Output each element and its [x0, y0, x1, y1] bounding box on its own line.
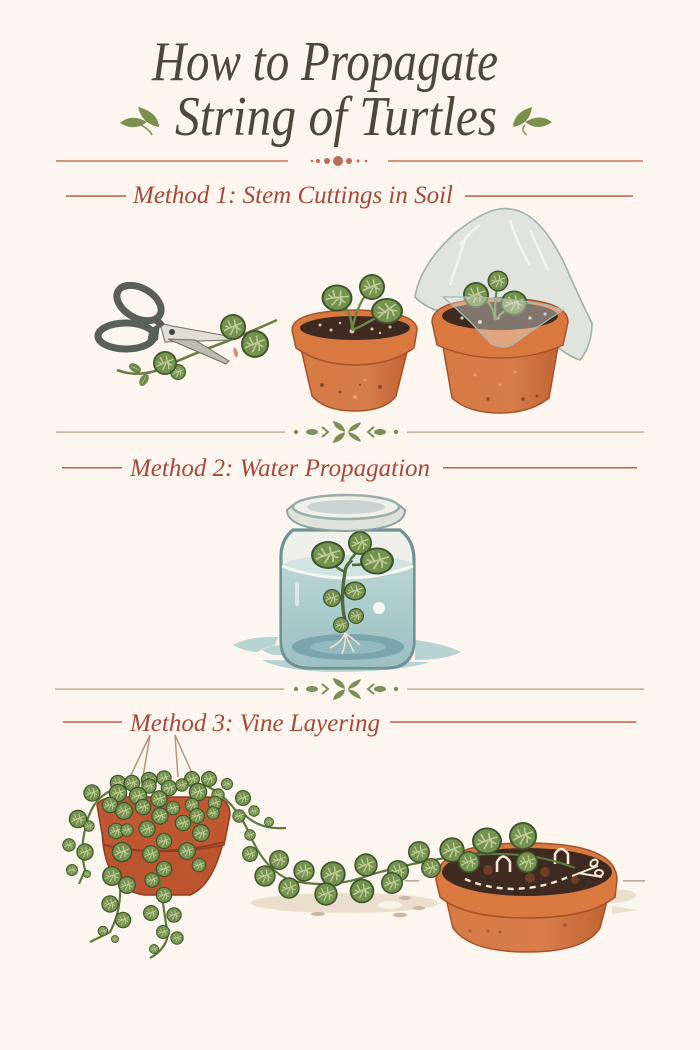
divider: leaf ornament — [55, 678, 644, 700]
heading: method 3: Method 3: Vine Layering — [129, 710, 380, 737]
divider: leaf ornament — [56, 421, 644, 443]
illustration: pot under plastic bag — [415, 208, 592, 413]
illustration: hanging pot — [97, 797, 230, 895]
icon: small scissors in soil — [572, 858, 603, 877]
icon: left title sprig — [120, 107, 159, 135]
illustration: layering pot — [436, 843, 617, 952]
ground shadow — [251, 890, 638, 917]
heading: method 2: Method 2: Water Propagation — [129, 455, 430, 482]
title: How to Propagate — [151, 31, 498, 93]
illustration: water puddle — [233, 637, 461, 672]
icon: scissors with cutting — [98, 278, 277, 388]
icon: right title sprig — [513, 107, 552, 135]
heading: method 1: Method 1: Stem Cuttings in Soil — [132, 182, 453, 209]
title — [151, 31, 498, 148]
illustration: string of turtles leaves — [62, 770, 538, 954]
title: String of Turtles — [175, 86, 497, 148]
dashes — [405, 880, 645, 882]
illustration: glass jar — [281, 495, 414, 668]
illustration: potted cutting — [292, 274, 417, 411]
illustration: vines — [79, 785, 575, 958]
illustration: hanging pot strings — [130, 735, 192, 777]
divider: dots — [56, 156, 643, 166]
